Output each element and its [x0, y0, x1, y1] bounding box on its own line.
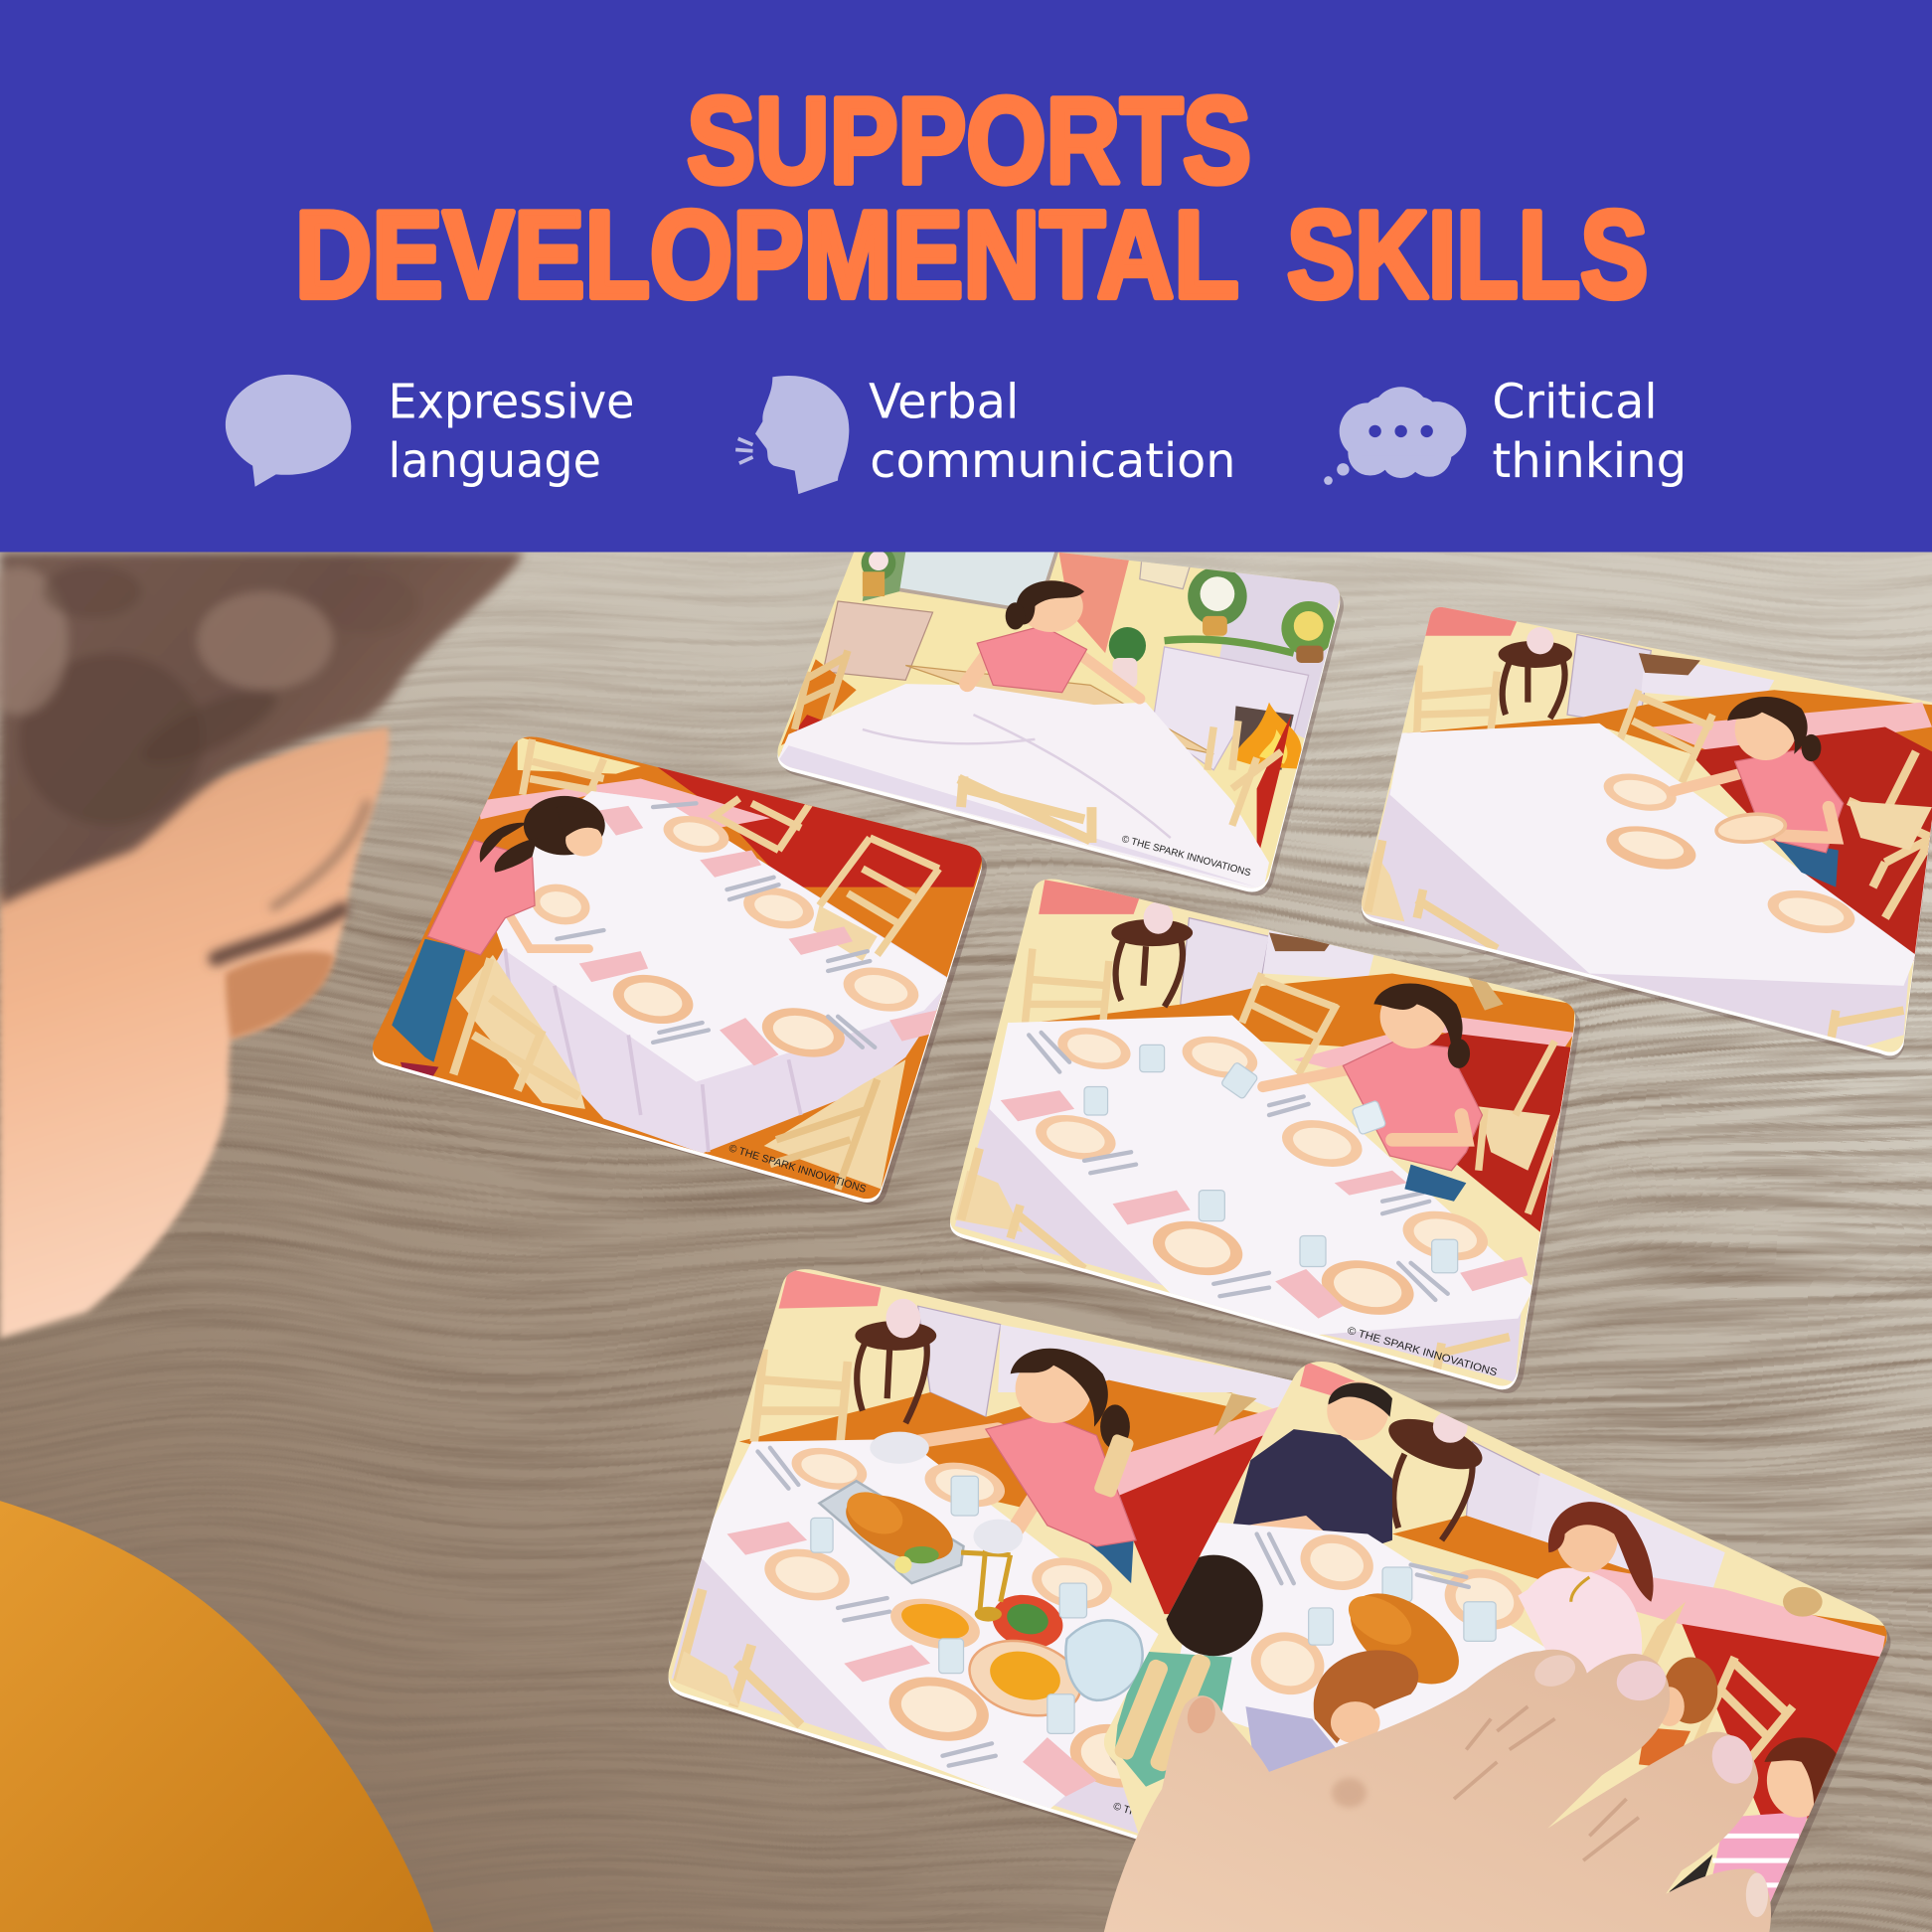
skill: expressive language: [226, 374, 634, 489]
label: Critical: [1492, 374, 1658, 429]
card: girl setting napkins and cutlery: [370, 733, 987, 1208]
card: girl placing plates: [1356, 604, 1932, 1059]
label: thinking: [1492, 433, 1687, 489]
title: DEVELOPMENTAL: [295, 187, 1239, 324]
icon: speech bubble: [226, 375, 351, 487]
label: Verbal: [869, 374, 1019, 429]
child's head: [0, 552, 524, 1338]
child's hand on cards: [1104, 1650, 1771, 1932]
card credit: © THE SPARK INNOVATIONS: [727, 1142, 868, 1196]
icon: speaking head: [735, 376, 849, 494]
title: SKILLS: [1287, 187, 1648, 324]
card: girl placing glasses: [942, 875, 1583, 1398]
skill: verbal communication: [735, 374, 1236, 494]
eye lashes and brow: [216, 803, 367, 959]
card credit: © THE SP: [1112, 1800, 1162, 1826]
child's orange shirt: [0, 1501, 433, 1932]
hair: [0, 552, 524, 905]
face: [0, 726, 389, 1338]
card credit: © THE SPARK INNOVATIONS: [1120, 834, 1252, 879]
card: girl serving dinner: [659, 1263, 1350, 1872]
card credit: © THE SPARK INNOVATIONS: [1346, 1325, 1499, 1378]
title: [295, 73, 1648, 324]
title: SUPPORTS: [687, 73, 1251, 209]
icon: thought cloud: [1324, 387, 1466, 485]
wooden table background: [0, 552, 1932, 1932]
label: communication: [870, 433, 1236, 489]
label: Expressive: [389, 374, 634, 429]
skill: critical thinking: [1324, 374, 1687, 489]
card: girl spreading tablecloth: [764, 530, 1356, 899]
card: family at dinner table: [1096, 1356, 1897, 1932]
label: language: [389, 433, 601, 489]
cheek below eye: [226, 951, 334, 1039]
top banner: [0, 0, 1932, 552]
